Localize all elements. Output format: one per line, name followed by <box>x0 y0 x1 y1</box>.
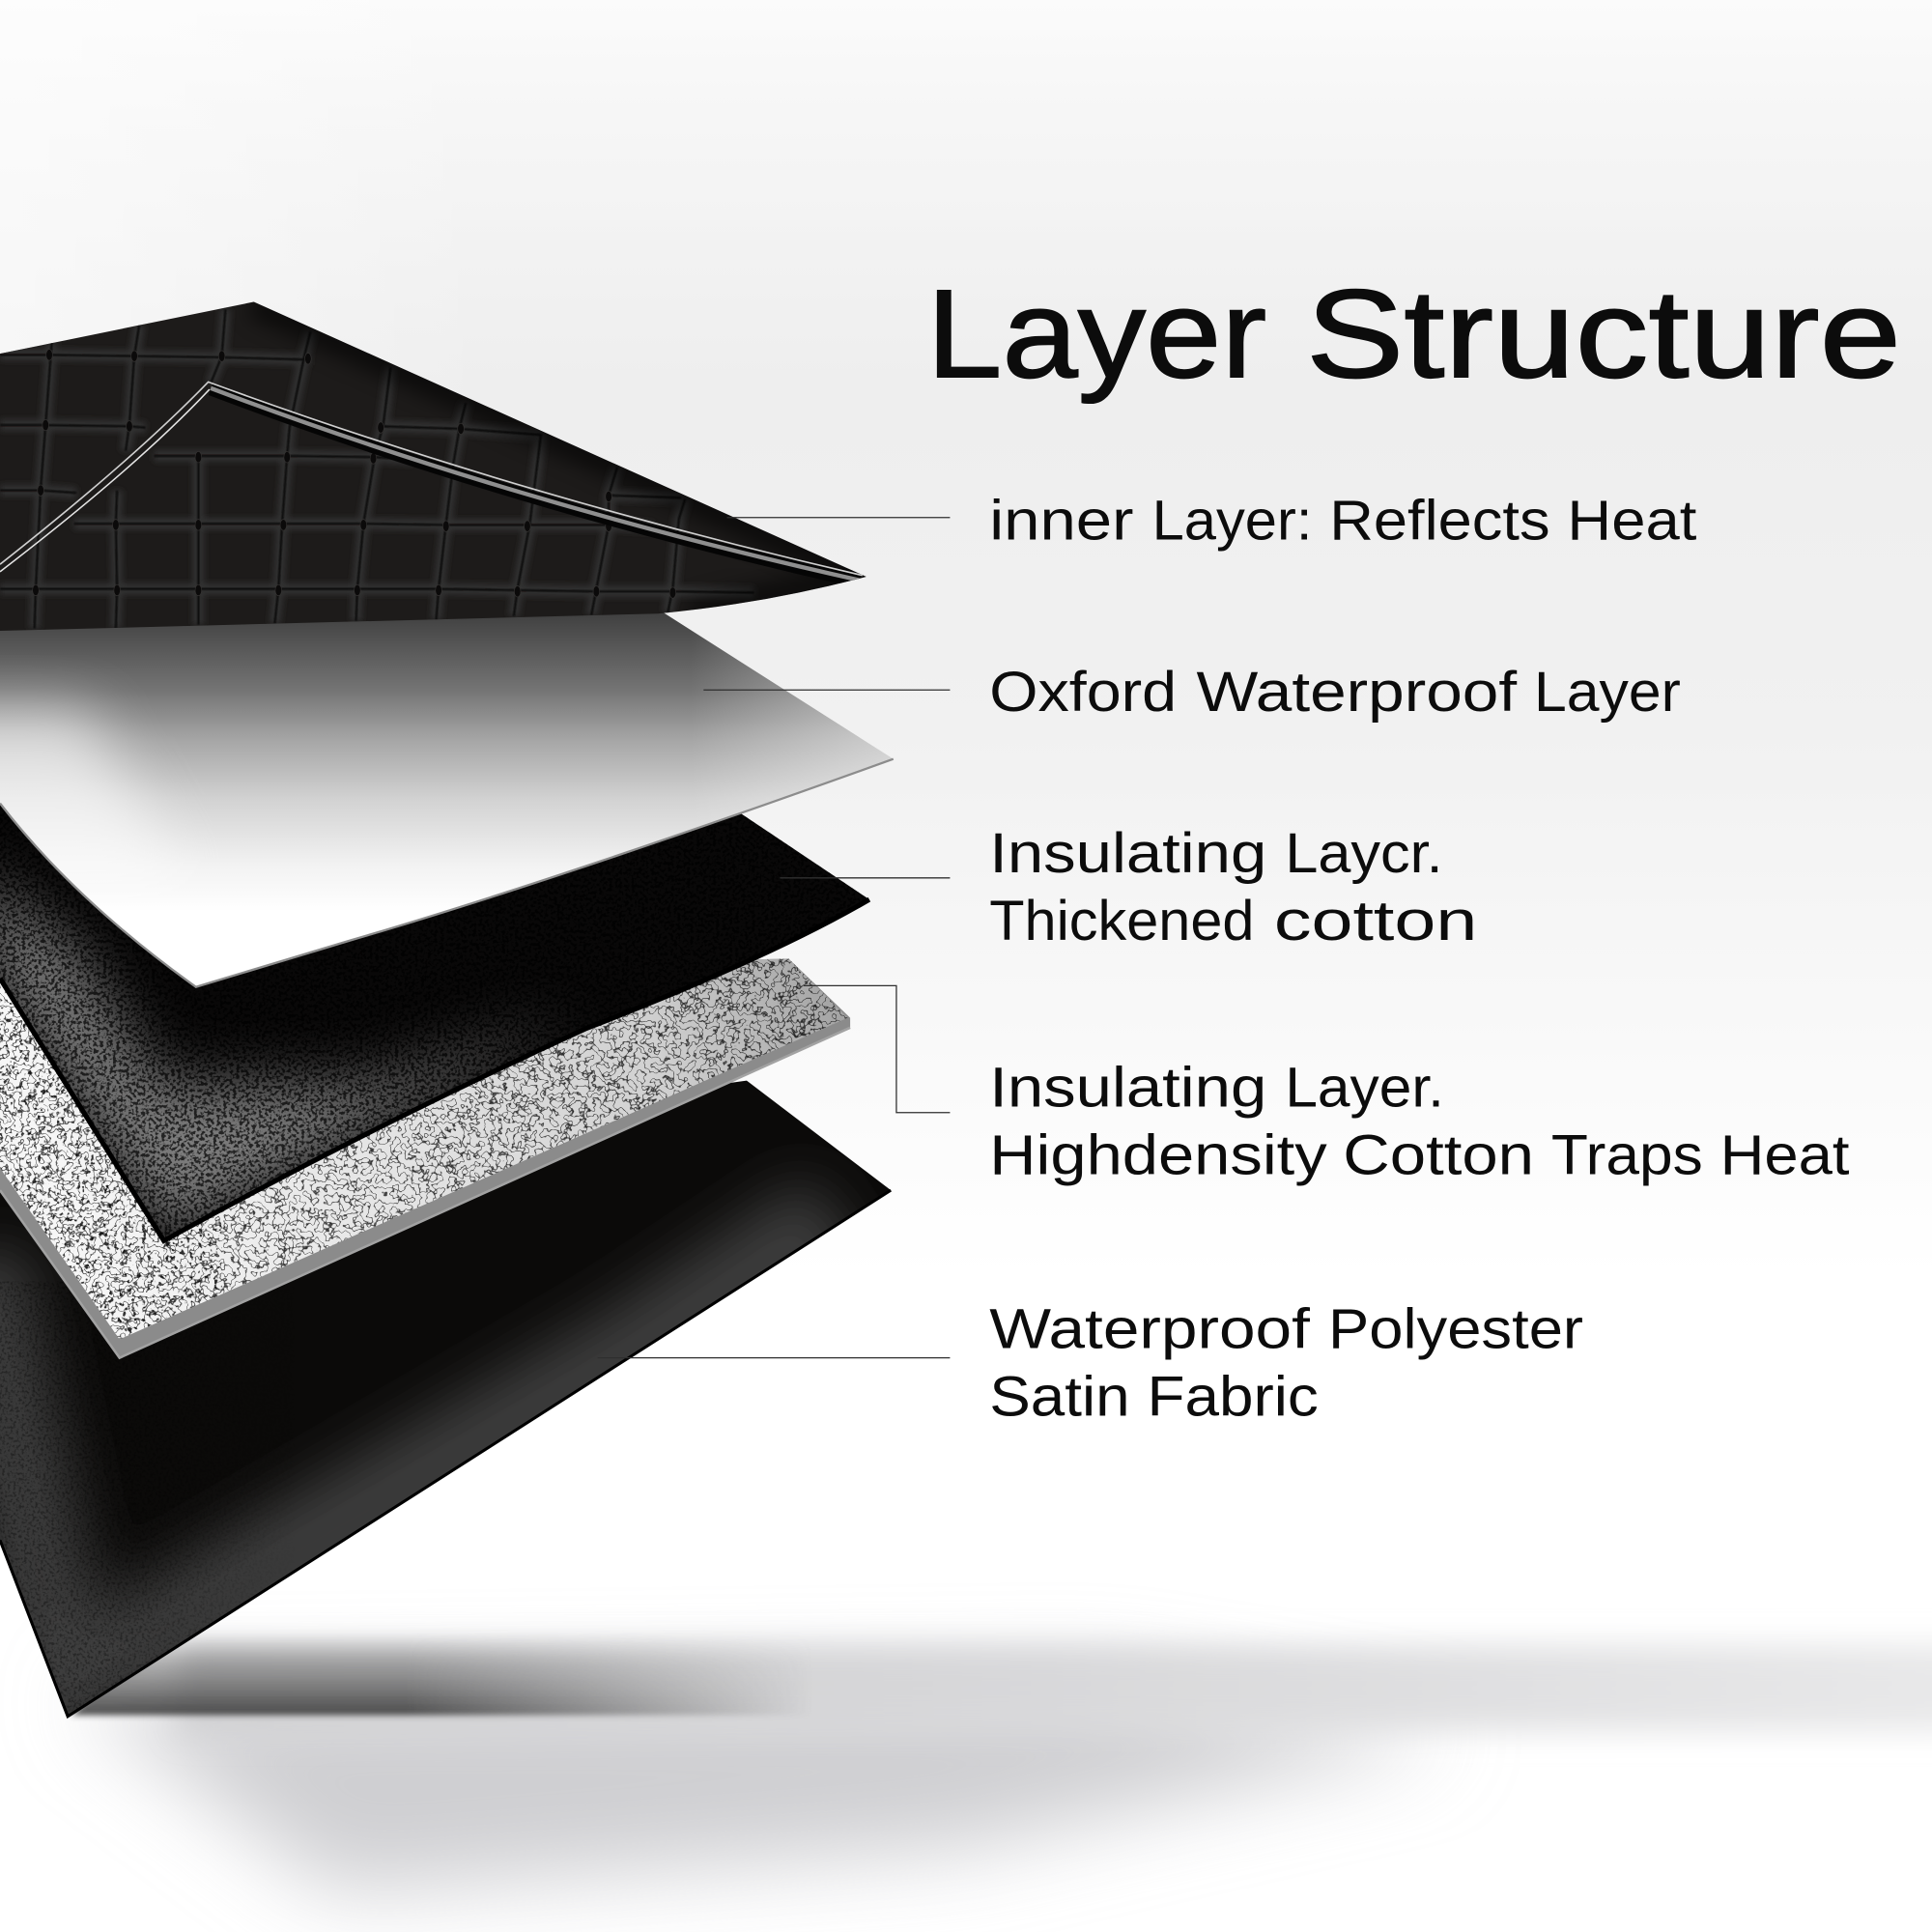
title: Layer <box>926 263 1266 404</box>
layer 4: high-density cotton, silver textured sheet <box>0 949 863 1358</box>
layer 5: waterproof polyester satin fabric <box>0 1081 891 1725</box>
folded edge stripe <box>0 382 863 582</box>
label: insulating thickened cotton: Laycr. <box>1285 822 1443 885</box>
layer 2: oxford waterproof layer <box>0 610 894 987</box>
label: inner layer: Reflects <box>1329 490 1550 553</box>
label: waterproof polyester satin: Fabric <box>1148 1366 1319 1429</box>
title: Structure <box>1306 263 1901 404</box>
floor shadow <box>71 1633 1932 1891</box>
label: insulating high-density cotton: Traps <box>1551 1124 1703 1187</box>
label: insulating high-density cotton: Layer. <box>1285 1056 1444 1119</box>
label: waterproof polyester satin: Polyester <box>1328 1297 1583 1360</box>
label: waterproof polyester satin: Satin <box>989 1366 1130 1429</box>
layer 3: insulating layer, thickened cotton <box>0 788 875 1257</box>
label: insulating thickened cotton: Thickened <box>989 890 1254 952</box>
label: insulating high-density cotton <box>989 1056 1850 1187</box>
label: insulating high-density cotton: Cotton <box>1343 1124 1534 1187</box>
label: inner layer: Layer: <box>1152 490 1312 553</box>
label: oxford waterproof layer: Waterproof <box>1197 661 1518 724</box>
label: insulating thickened cotton: Insulating <box>989 822 1266 885</box>
label: waterproof polyester satin: Waterproof <box>989 1297 1311 1360</box>
label: insulating high-density cotton: Insulating <box>989 1056 1266 1119</box>
label: oxford waterproof layer: Oxford <box>989 661 1177 724</box>
leader lines <box>598 518 950 1358</box>
label: insulating high-density cotton: Heat <box>1720 1124 1850 1187</box>
label: insulating thickened cotton: cotton <box>1274 890 1477 952</box>
label: oxford waterproof layer: Layer <box>1534 661 1681 724</box>
layer 1: inner quilted reflective layer <box>0 301 867 631</box>
label: inner layer: Heat <box>1567 490 1696 553</box>
quilted stitching grid <box>0 301 867 629</box>
label: insulating thickened cotton <box>989 822 1477 952</box>
label: waterproof polyester satin <box>989 1297 1583 1429</box>
label: insulating high-density cotton: Highdensity <box>989 1124 1327 1187</box>
label: inner layer: inner <box>989 490 1133 553</box>
